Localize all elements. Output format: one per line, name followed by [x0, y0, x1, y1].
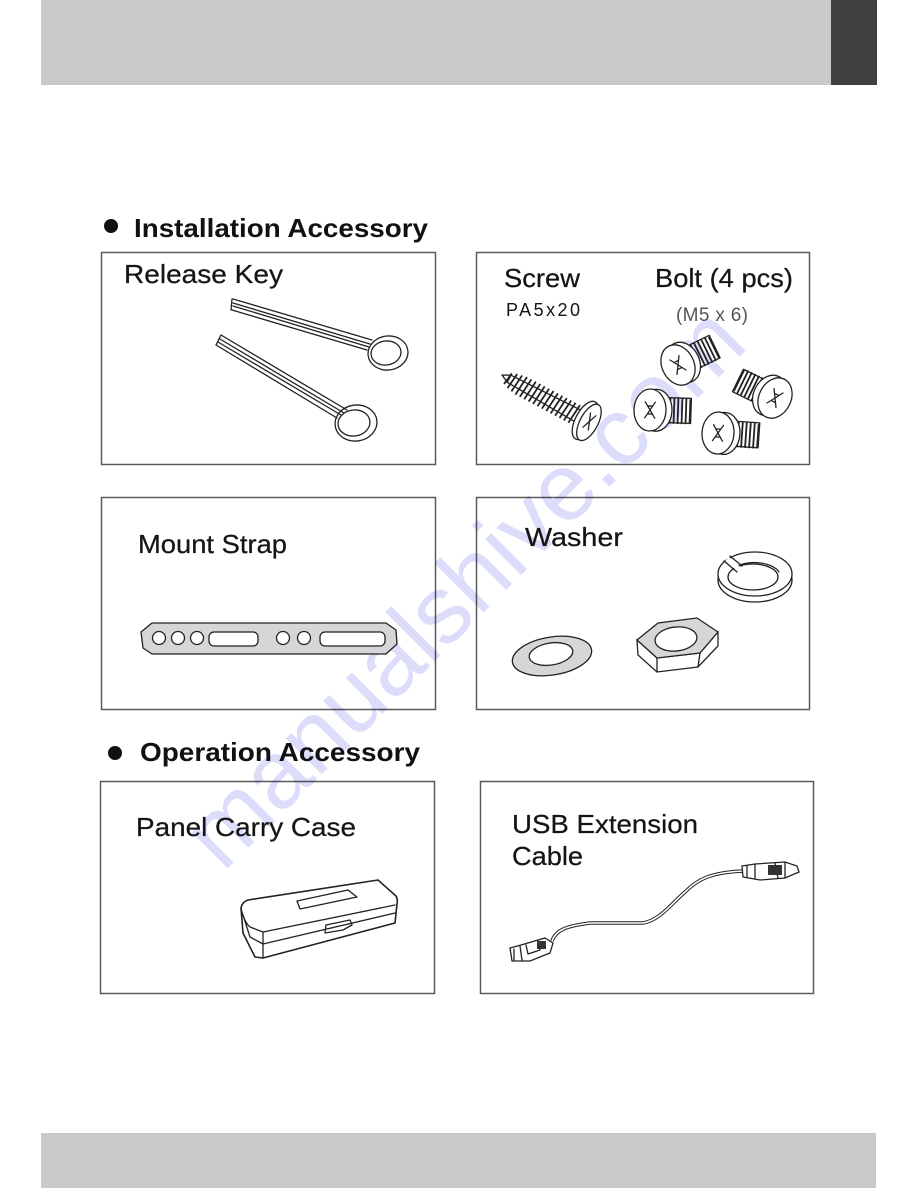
- icon: release keys: [216, 299, 410, 444]
- icon: mount strap: [141, 623, 397, 654]
- label: release key: Release Key: [124, 259, 283, 289]
- panel: mount strap frame: [102, 498, 436, 710]
- icon: bolt 2: [729, 361, 799, 424]
- icon: hex nut: [637, 618, 718, 672]
- footer band: [41, 1133, 876, 1188]
- heading: installation accessory: Installation Accessory: [134, 213, 429, 243]
- header band: [41, 0, 877, 85]
- watermark: manualshive.com: [162, 285, 765, 888]
- label: bolt: Bolt (4 pcs): [655, 263, 793, 293]
- icon: bolt 4: [701, 411, 760, 457]
- icon: screw: [492, 357, 607, 445]
- icon: bolt 3: [633, 388, 692, 432]
- label: washer: Washer: [525, 522, 623, 552]
- icon: flat washer: [510, 631, 594, 681]
- icon: bolt 1: [654, 328, 724, 391]
- panel: screw and bolt frame: [476, 252, 810, 464]
- panel: release key frame: [102, 252, 436, 464]
- label: screw size: PA5x20: [506, 300, 580, 320]
- icon: carry case: [241, 880, 397, 958]
- heading: operation accessory: Operation Accessory: [140, 737, 421, 767]
- panel: panel carry case frame: [100, 782, 434, 994]
- label: mount strap: Mount Strap: [138, 529, 287, 559]
- label: bolt size: (M5 x 6): [676, 305, 748, 326]
- header dark tab: [831, 0, 877, 85]
- panel: usb extension cable frame: [480, 782, 814, 994]
- icon: spring washer: [718, 552, 792, 602]
- label: usb extension: USB Extension: [512, 809, 698, 839]
- panel: washer frame: [476, 498, 810, 710]
- icon: usb cable: [510, 862, 799, 961]
- label: screw: Screw: [504, 263, 580, 293]
- label: panel carry case: Panel Carry Case: [136, 812, 356, 842]
- label: cable: Cable: [512, 841, 583, 871]
